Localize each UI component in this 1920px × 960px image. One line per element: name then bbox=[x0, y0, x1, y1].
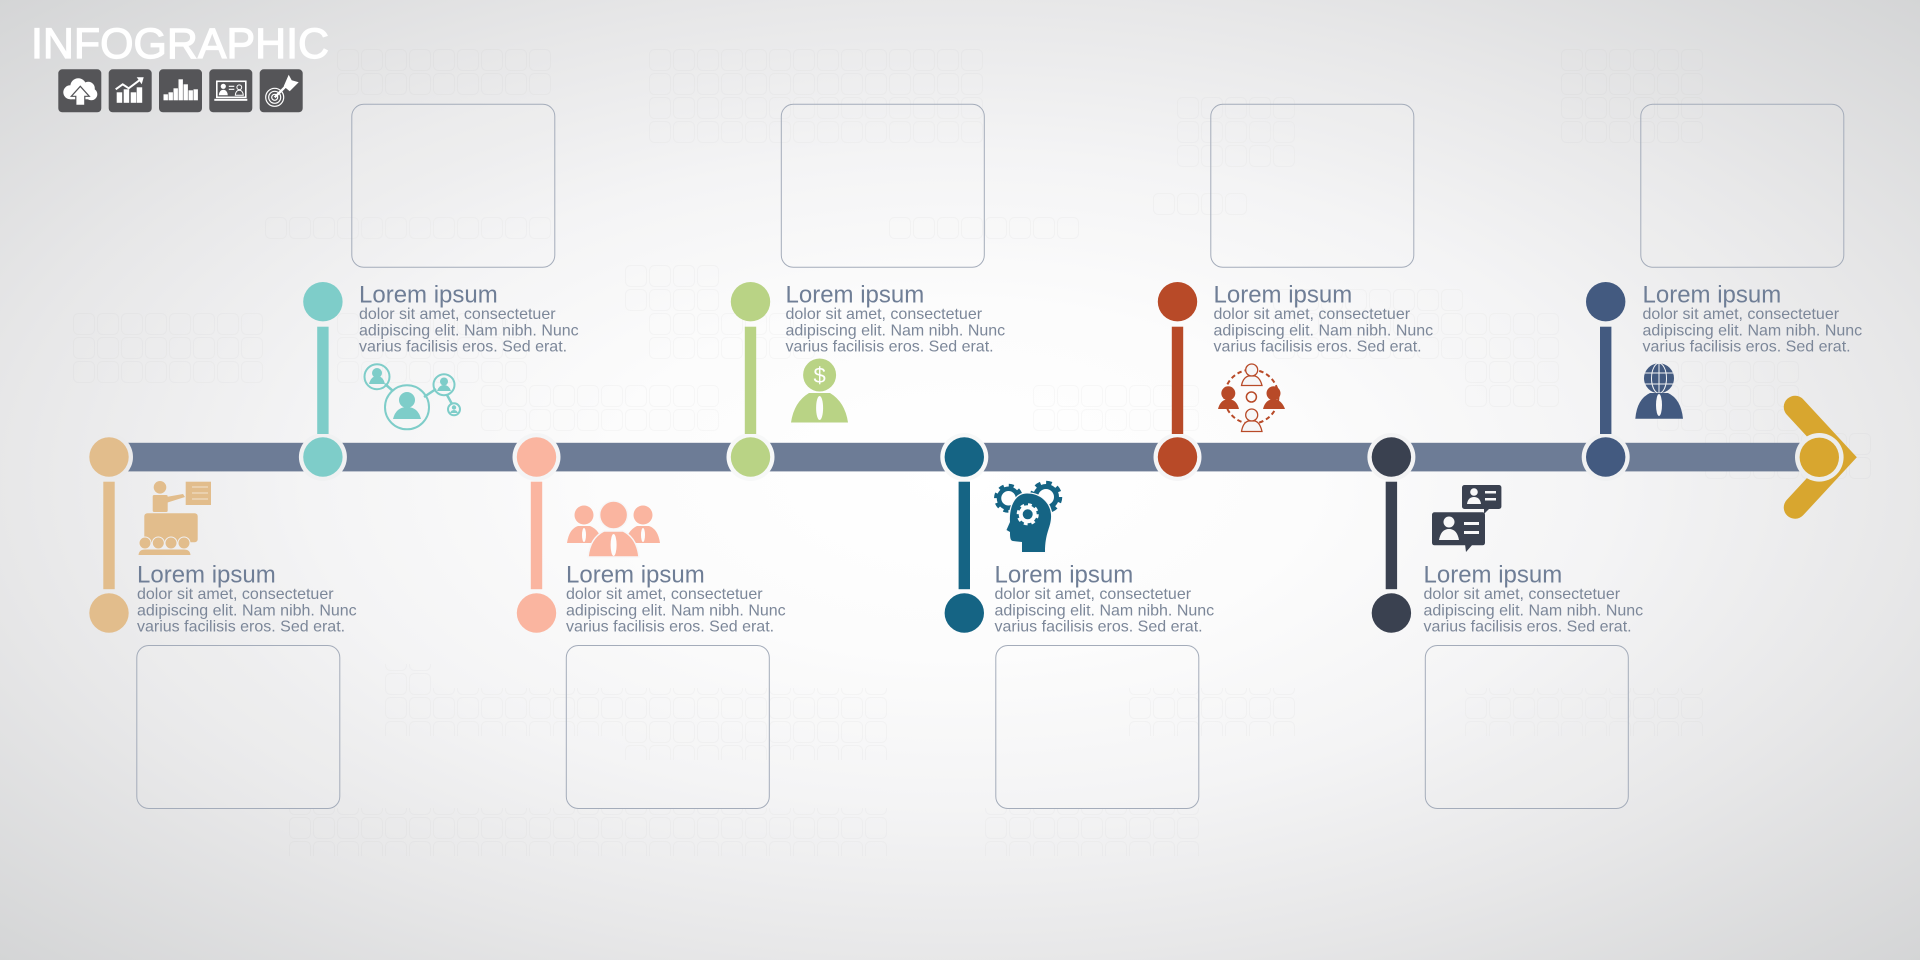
text: step 2: adipiscing elit. Nam nibh. Nunc bbox=[359, 322, 579, 339]
text: step 1: dolor sit amet, consectetuer bbox=[137, 586, 334, 603]
step 2: teal, upward bbox=[299, 282, 579, 481]
step 4: green, upward bbox=[726, 282, 1005, 481]
text: step 6: Lorem ipsum bbox=[1214, 282, 1352, 309]
icon: finance person: $ bbox=[813, 363, 826, 388]
image placeholder boxes bbox=[137, 104, 1844, 809]
icon: head with gears bbox=[996, 483, 1060, 552]
text: step 8 bbox=[1642, 282, 1862, 355]
step 3: salmon, downward bbox=[512, 433, 786, 636]
text: step 7: dolor sit amet, consectetuer bbox=[1424, 586, 1621, 603]
icon: growth chart bbox=[109, 69, 152, 112]
text: step 7: Lorem ipsum bbox=[1424, 562, 1562, 589]
arrow head bbox=[1795, 407, 1844, 508]
timeline bar bbox=[124, 443, 1810, 471]
icon: laptop with people bbox=[209, 69, 252, 112]
step 1: tan, downward bbox=[85, 433, 357, 636]
text: step 2 bbox=[359, 282, 579, 355]
text: step 1 bbox=[137, 562, 357, 636]
text: step 5: dolor sit amet, consectetuer bbox=[994, 586, 1192, 603]
text: step 8: Lorem ipsum bbox=[1642, 282, 1781, 309]
icon: chat bubbles bbox=[1432, 485, 1501, 552]
text: step 8: dolor sit amet, consectetuer bbox=[1642, 306, 1840, 323]
text: step 2: Lorem ipsum bbox=[359, 282, 498, 309]
text: step 2: varius facilisis eros. Sed erat. bbox=[359, 338, 567, 355]
step 5: dark teal, downward bbox=[940, 433, 1214, 636]
text: step 3: varius facilisis eros. Sed erat. bbox=[566, 619, 774, 636]
icon: bar chart bbox=[159, 69, 202, 112]
text: step 6: adipiscing elit. Nam nibh. Nunc bbox=[1214, 322, 1433, 339]
text: step 2: dolor sit amet, consectetuer bbox=[359, 306, 556, 323]
text: step 4: dolor sit amet, consectetuer bbox=[786, 306, 983, 323]
text: step 8: varius facilisis eros. Sed erat. bbox=[1642, 338, 1851, 355]
text: step 7: varius facilisis eros. Sed erat. bbox=[1424, 619, 1632, 636]
step 8: navy, upward bbox=[1582, 282, 1862, 481]
text: step 3: dolor sit amet, consectetuer bbox=[566, 586, 763, 603]
text: step 4: adipiscing elit. Nam nibh. Nunc bbox=[786, 322, 1005, 339]
text: step 3 bbox=[566, 562, 786, 636]
text: step 8: adipiscing elit. Nam nibh. Nunc bbox=[1642, 322, 1862, 339]
title: INFOGRAPHIC bbox=[31, 20, 329, 68]
text: step 1: varius facilisis eros. Sed erat. bbox=[137, 619, 345, 636]
icon: team cycle bbox=[1218, 364, 1285, 432]
text: step 4: Lorem ipsum bbox=[786, 282, 924, 309]
text: step 5: adipiscing elit. Nam nibh. Nunc bbox=[994, 602, 1214, 619]
text: step 5: Lorem ipsum bbox=[994, 562, 1133, 589]
text: step 5: varius facilisis eros. Sed erat. bbox=[994, 619, 1203, 636]
text: step 7: adipiscing elit. Nam nibh. Nunc bbox=[1424, 602, 1643, 619]
icon: finance person bbox=[791, 358, 848, 422]
text: step 5 bbox=[994, 562, 1214, 636]
icon: business team bbox=[567, 501, 660, 557]
text: step 1: Lorem ipsum bbox=[137, 562, 276, 589]
text: step 1: adipiscing elit. Nam nibh. Nunc bbox=[137, 602, 357, 619]
text: step 6: dolor sit amet, consectetuer bbox=[1214, 306, 1411, 323]
step 7: charcoal, downward bbox=[1367, 433, 1643, 636]
text: step 6 bbox=[1214, 282, 1433, 355]
icon: presenter bbox=[138, 481, 211, 555]
icon row bbox=[58, 69, 303, 112]
text: step 3: adipiscing elit. Nam nibh. Nunc bbox=[566, 602, 786, 619]
text: step 4: varius facilisis eros. Sed erat. bbox=[786, 338, 994, 355]
text: step 4 bbox=[786, 282, 1005, 355]
text: step 6: varius facilisis eros. Sed erat. bbox=[1214, 338, 1422, 355]
icon: cloud upload bbox=[58, 69, 101, 112]
step 6: rust, upward bbox=[1154, 282, 1433, 481]
icon: target with arrow bbox=[260, 69, 303, 112]
text: step 3: Lorem ipsum bbox=[566, 562, 705, 589]
text: step 7 bbox=[1424, 562, 1643, 636]
icon: people network bbox=[364, 364, 460, 429]
icon: global person bbox=[1635, 363, 1683, 419]
